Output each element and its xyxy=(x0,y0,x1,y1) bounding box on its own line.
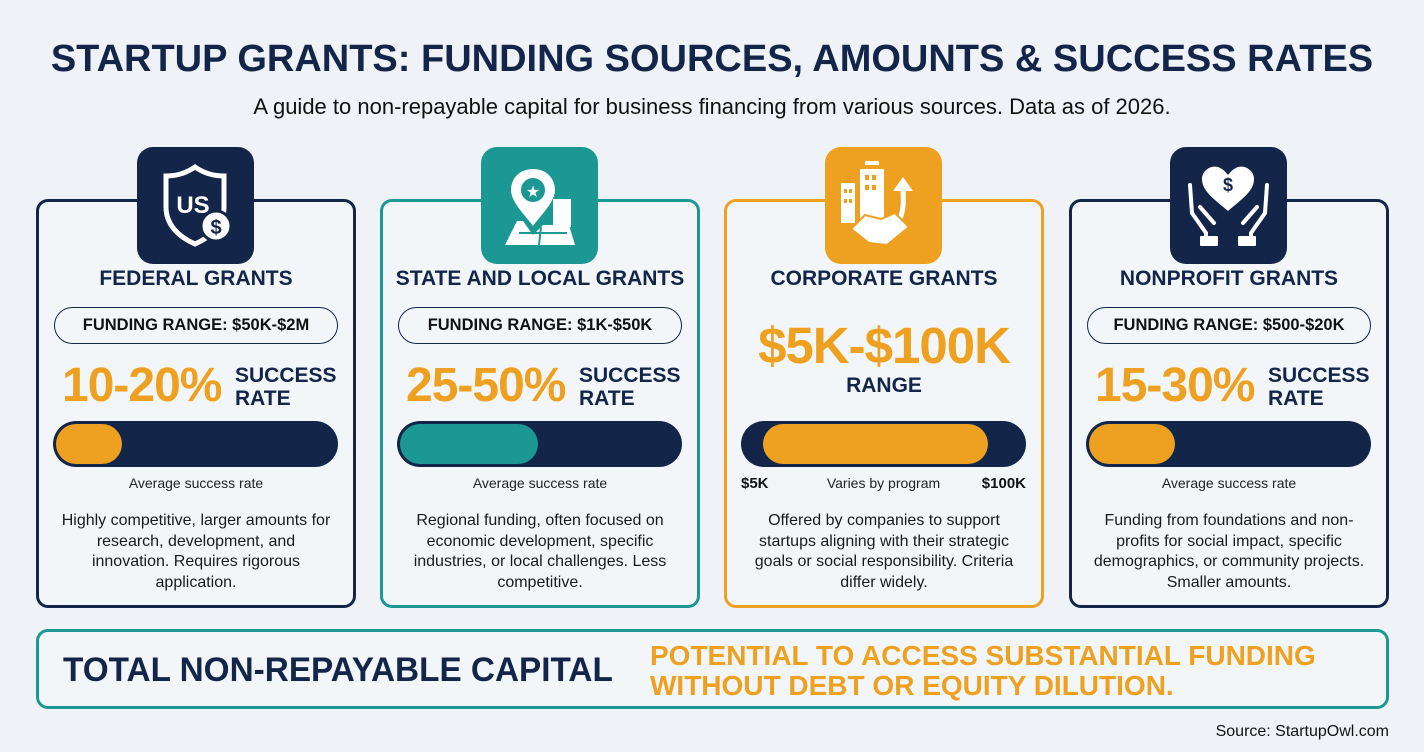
funding range pill xyxy=(398,307,682,344)
progress bar xyxy=(397,421,682,467)
funding range pill: FUNDING RANGE: $50K-$2M xyxy=(83,316,309,334)
banner message xyxy=(650,640,1316,701)
description: Highly competitive, larger amounts for research, development, and innovation. Requires rigorous application. xyxy=(62,512,330,590)
icon: map pin xyxy=(481,147,598,264)
success rate label: RATE xyxy=(235,387,291,410)
funding range pill xyxy=(1087,307,1371,344)
progress bar xyxy=(1086,421,1371,467)
success rate label xyxy=(235,364,337,410)
panel: federal grants xyxy=(36,199,356,608)
icon: US shield: US xyxy=(176,192,210,219)
funding range pill: FUNDING RANGE: $500-$20K xyxy=(1113,316,1345,334)
funding range pill: FUNDING RANGE: $1K-$50K xyxy=(428,316,652,334)
panel: nonprofit grants xyxy=(1069,199,1389,608)
icon: US shield xyxy=(137,147,254,264)
source: Source: StartupOwl.com xyxy=(1216,723,1389,740)
description: Offered by companies to support startups aligning with their strategic goals or social responsibility. Criteria differ widely. xyxy=(755,512,1013,590)
success rate figure: 25-50% xyxy=(406,359,565,412)
range bar xyxy=(741,421,1026,467)
caption: Average success rate xyxy=(129,475,263,491)
icon: US shield: $ xyxy=(210,217,222,239)
range label: RANGE xyxy=(846,374,922,397)
title: STARTUP GRANTS: FUNDING SOURCES, AMOUNTS & SUCCESS RATES xyxy=(51,38,1373,80)
success rate label: RATE xyxy=(579,387,635,410)
subtitle: A guide to non-repayable capital for business financing from various sources. Data as of 2026. xyxy=(253,94,1171,119)
icon: map pin: ★ xyxy=(526,182,540,201)
icon: hands with heart xyxy=(1170,147,1287,264)
card title: state: STATE AND LOCAL GRANTS xyxy=(396,267,684,290)
banner: total non-repayable capital xyxy=(36,629,1389,709)
success rate label: RATE xyxy=(1268,387,1324,410)
progress bar xyxy=(53,421,338,467)
description: Regional funding, often focused on economic development, specific industries, or local challenges. Less competitive. xyxy=(414,512,666,590)
bar labels: $100K xyxy=(982,475,1026,492)
success rate label: SUCCESS xyxy=(235,364,337,387)
funding range pill xyxy=(54,307,338,344)
bar labels: $5K xyxy=(741,475,769,492)
icon: handshake buildings xyxy=(825,147,942,264)
range figure: $5K-$100K xyxy=(758,317,1010,374)
success rate label: SUCCESS xyxy=(1268,364,1370,387)
card title: corporate: CORPORATE GRANTS xyxy=(770,267,998,290)
bar labels xyxy=(741,475,1026,492)
bar labels: Varies by program xyxy=(827,475,940,491)
description: Funding from foundations and non-profits for social impact, specific demographics, or community projects. Smaller amounts. xyxy=(1094,512,1364,590)
success rate figure: 15-30% xyxy=(1095,359,1254,412)
success rate figure: 10-20% xyxy=(62,359,221,412)
caption: Average success rate xyxy=(473,475,607,491)
card title: federal: FEDERAL GRANTS xyxy=(99,267,293,290)
banner message: POTENTIAL TO ACCESS SUBSTANTIAL FUNDING xyxy=(650,640,1316,671)
success rate label xyxy=(1268,364,1370,410)
panel: corporate grants xyxy=(724,199,1044,608)
panel: state and local grants xyxy=(380,199,700,608)
success rate label: SUCCESS xyxy=(579,364,681,387)
success rate label xyxy=(579,364,681,410)
banner message: WITHOUT DEBT OR EQUITY DILUTION. xyxy=(650,670,1174,701)
icon: hands with heart: $ xyxy=(1223,175,1233,195)
card title: nonprofit: NONPROFIT GRANTS xyxy=(1120,267,1338,290)
banner label: TOTAL NON-REPAYABLE CAPITAL xyxy=(63,651,613,689)
caption: Average success rate xyxy=(1162,475,1296,491)
